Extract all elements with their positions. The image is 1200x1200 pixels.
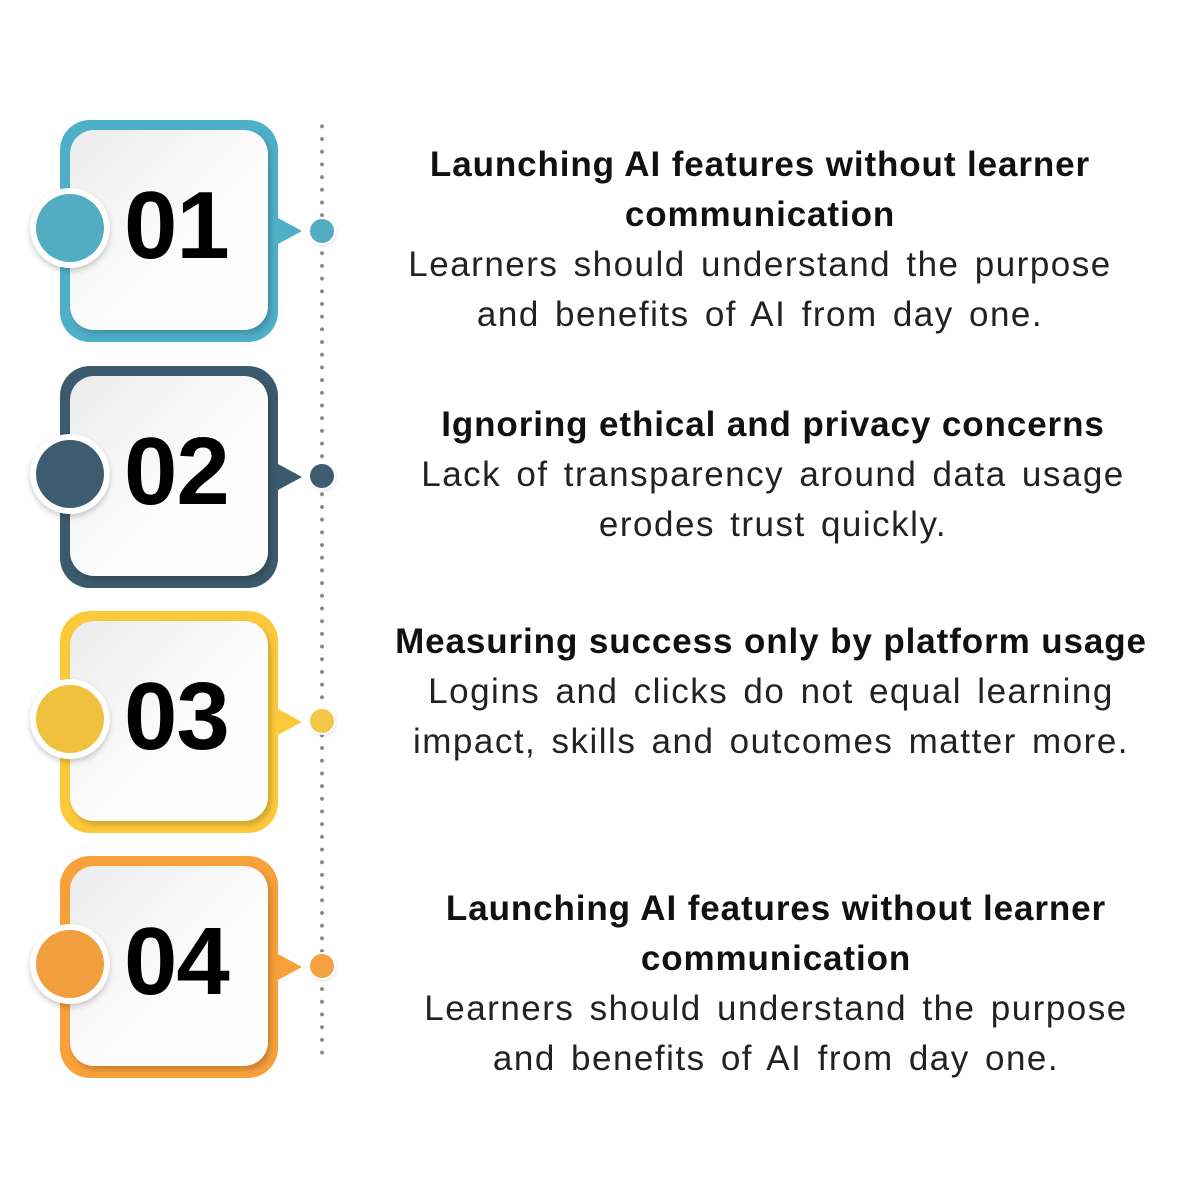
text 02: erodes trust quickly. <box>599 505 947 544</box>
text 02: Ignoring ethical and privacy concerns <box>441 405 1105 444</box>
card 04 <box>60 856 278 1078</box>
card 01: 01 <box>124 172 229 279</box>
text 03: impact, skills and outcomes matter more. <box>413 722 1129 761</box>
dot 02 <box>310 464 334 488</box>
text 01: Learners should understand the purpose <box>408 245 1112 284</box>
card 01 <box>60 120 278 342</box>
card 03: 03 <box>124 663 229 770</box>
card 02: 02 <box>124 418 229 525</box>
text 02: Lack of transparency around data usage <box>421 455 1125 494</box>
text 03: Measuring success only by platform usage <box>395 622 1147 661</box>
text 01: communication <box>625 195 895 234</box>
text 04 <box>424 889 1128 1078</box>
card 04: 04 <box>124 908 229 1015</box>
card 03 <box>60 611 278 833</box>
text 01: Launching AI features without learner <box>430 145 1090 184</box>
text 04: Launching AI features without learner <box>446 889 1106 928</box>
text 03 <box>395 622 1147 761</box>
card 02 <box>60 366 278 588</box>
text 02 <box>421 405 1125 544</box>
dot 04 <box>310 954 334 978</box>
text 04: and benefits of AI from day one. <box>493 1039 1059 1078</box>
dot 01 <box>310 219 334 243</box>
text 04: communication <box>641 939 911 978</box>
text 01: and benefits of AI from day one. <box>477 295 1043 334</box>
text 03: Logins and clicks do not equal learning <box>428 672 1114 711</box>
dotted timeline <box>320 120 324 1058</box>
text 01 <box>408 145 1112 334</box>
text 04: Learners should understand the purpose <box>424 989 1128 1028</box>
dot 03 <box>310 709 334 733</box>
